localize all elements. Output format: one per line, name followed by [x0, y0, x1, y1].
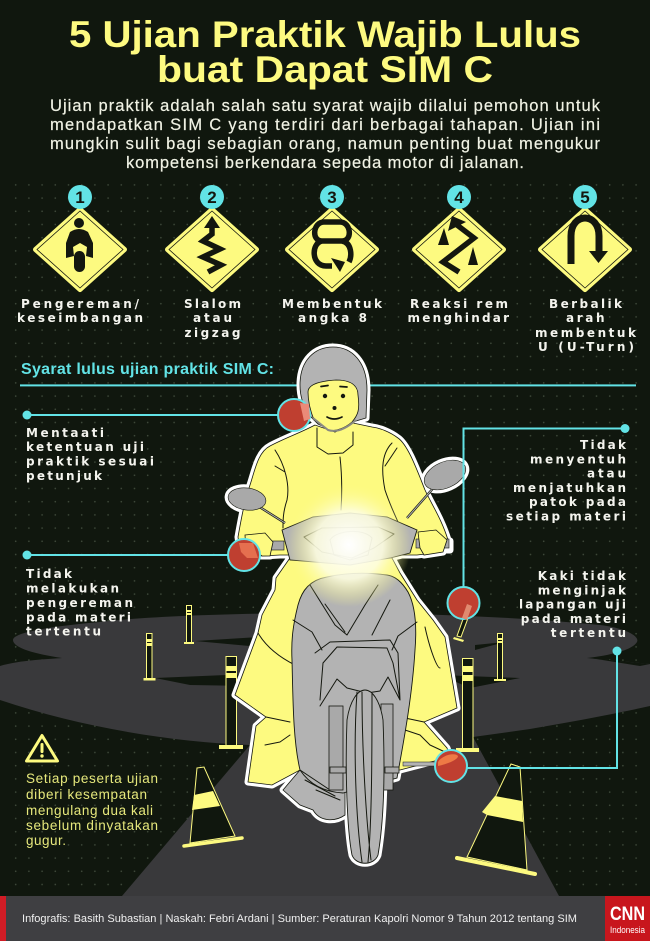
- warning icon: [26, 736, 58, 761]
- label 4: menghindar: [408, 311, 509, 325]
- body fold lines: [258, 428, 445, 752]
- road: [0, 613, 650, 896]
- callout: requirement 2: [22, 539, 260, 639]
- requirements heading: Syarat lulus ujian praktik SIM C:: [21, 361, 274, 378]
- intro text: [50, 97, 601, 172]
- CNN Indonesia logo: Indonesia: [610, 925, 645, 935]
- warning note: mengulang dua kali: [26, 803, 153, 818]
- intro text: mendapatkan SIM C yang terdiri dari berbagai tahapan. Ujian ini: [50, 116, 600, 134]
- callout: requirement 2: Tidak: [26, 567, 73, 581]
- label 4: [408, 297, 509, 325]
- step 5: u-turn: [540, 185, 630, 290]
- label 2: Slalom: [184, 297, 241, 311]
- callout: requirement 3: atau: [587, 467, 626, 481]
- title: [69, 14, 581, 90]
- motorcycle front shield: [292, 573, 416, 793]
- callout: requirement 4: pada materi: [521, 612, 626, 626]
- motorcycle fairing: [282, 513, 417, 565]
- left traffic cone: [184, 767, 242, 846]
- right traffic cone: [457, 764, 535, 874]
- step 5: u-turn: 5: [580, 188, 590, 207]
- callout: requirement 3: patok pada: [529, 495, 626, 509]
- CNN Indonesia logo: CNN: [610, 904, 645, 925]
- raincoat legs: [235, 555, 457, 785]
- warning note: Setiap peserta ujian: [26, 771, 158, 786]
- dashboard details: [304, 527, 394, 560]
- callout: requirement 4: menginjak: [538, 583, 627, 597]
- callout: requirement 4: lapangan uji: [519, 598, 626, 612]
- motorcycle exhaust: [283, 770, 345, 820]
- step 4: evasive braking: 4: [454, 188, 464, 207]
- step 1: braking and balance: [36, 185, 124, 290]
- label 2: [184, 297, 241, 340]
- label 1: Pengereman/: [21, 297, 140, 311]
- callout: requirement 3: [448, 424, 630, 620]
- label 5: U (U-Turn): [538, 340, 634, 354]
- warning note: gugur.: [26, 833, 66, 848]
- wheel tread lines: [355, 692, 372, 862]
- floorboard: [403, 762, 440, 766]
- intro text: kompetensi berkendara sepeda motor di jalanan.: [126, 154, 524, 172]
- step 1: braking and balance: 1: [75, 188, 85, 207]
- label 1: keseimbangan: [17, 311, 143, 325]
- label 2: atau: [193, 311, 232, 325]
- callout: requirement 1: [22, 399, 310, 483]
- white silhouette outline: [227, 347, 470, 863]
- footer credits: Infografis: Basith Subastian | Naskah: Febri Ardani | Sumber: Peraturan Kapolri Nomor 9 Tahun 2012 tentang SIM: [22, 913, 577, 925]
- label 4: Reaksi rem: [410, 297, 508, 311]
- callout: requirement 1: praktik sesuai: [26, 454, 154, 468]
- label 3: angka 8: [298, 311, 367, 325]
- callout: requirement 3: menyentuh: [530, 452, 626, 466]
- intro text: mungkin sulit bagi sebagian orang, namun penting buat mengukur: [50, 135, 601, 153]
- CNN Indonesia logo: [605, 896, 650, 941]
- hands: [245, 530, 447, 556]
- callout: requirement 2: melakukan: [26, 582, 119, 596]
- raincoat body: [238, 423, 448, 556]
- label 5: [535, 297, 637, 354]
- step 3: figure eight: 3: [327, 188, 337, 207]
- step 3: figure eight: [288, 185, 376, 290]
- callout: requirement 4: Kaki tidak: [538, 569, 627, 583]
- callout: requirement 1: ketentuan uji: [26, 440, 144, 454]
- step 2: slalom: 2: [207, 188, 217, 207]
- footer bar: [0, 896, 650, 941]
- handlebar grips: [268, 539, 449, 550]
- front wheel: [346, 690, 384, 863]
- warning note: [26, 771, 158, 848]
- callout: requirement 2: tertentu: [26, 625, 101, 639]
- step 2: slalom: [168, 185, 256, 290]
- label 2: zigzag: [184, 326, 240, 340]
- front forks: [329, 704, 399, 790]
- left mirror: [227, 485, 285, 523]
- callout: requirement 1: petunjuk: [26, 469, 103, 483]
- warning note: sebelum dinyatakan: [26, 818, 158, 833]
- heading rule: [20, 384, 636, 386]
- footer red accent: [0, 896, 6, 941]
- callout: requirement 4: [435, 569, 627, 782]
- callout: requirement 2: pada materi: [26, 611, 131, 625]
- intro text: Ujian praktik adalah salah satu syarat wajib dilalui pemohon untuk: [50, 97, 601, 115]
- title: buat Dapat SIM C: [157, 49, 493, 90]
- step 4: evasive braking: [414, 185, 504, 290]
- label 5: arah: [566, 311, 604, 325]
- shield details: [293, 585, 417, 800]
- callout: requirement 3: Tidak: [580, 438, 627, 452]
- label 3: Membentuk: [282, 297, 383, 311]
- warning note: diberi kesempatan: [26, 787, 147, 802]
- label 5: Berbalik: [549, 297, 623, 311]
- right mirror: [407, 454, 470, 518]
- label 1: [17, 297, 143, 325]
- face: [308, 380, 359, 431]
- callout: requirement 1: Mentaati: [26, 426, 104, 440]
- title: 5 Ujian Praktik Wajib Lulus: [69, 14, 581, 55]
- callout: requirement 4: tertentu: [551, 626, 626, 640]
- callout: requirement 3: setiap materi: [506, 509, 626, 523]
- headlight glow: [287, 483, 411, 607]
- label 5: membentuk: [535, 326, 637, 340]
- callout: requirement 2: pengereman: [26, 596, 133, 610]
- rider on motorcycle: [227, 347, 470, 863]
- callout: requirement 3: menjatuhkan: [513, 481, 626, 495]
- label 3: [282, 297, 383, 325]
- helmet: [300, 347, 367, 432]
- traffic poles and shadows: [144, 606, 650, 752]
